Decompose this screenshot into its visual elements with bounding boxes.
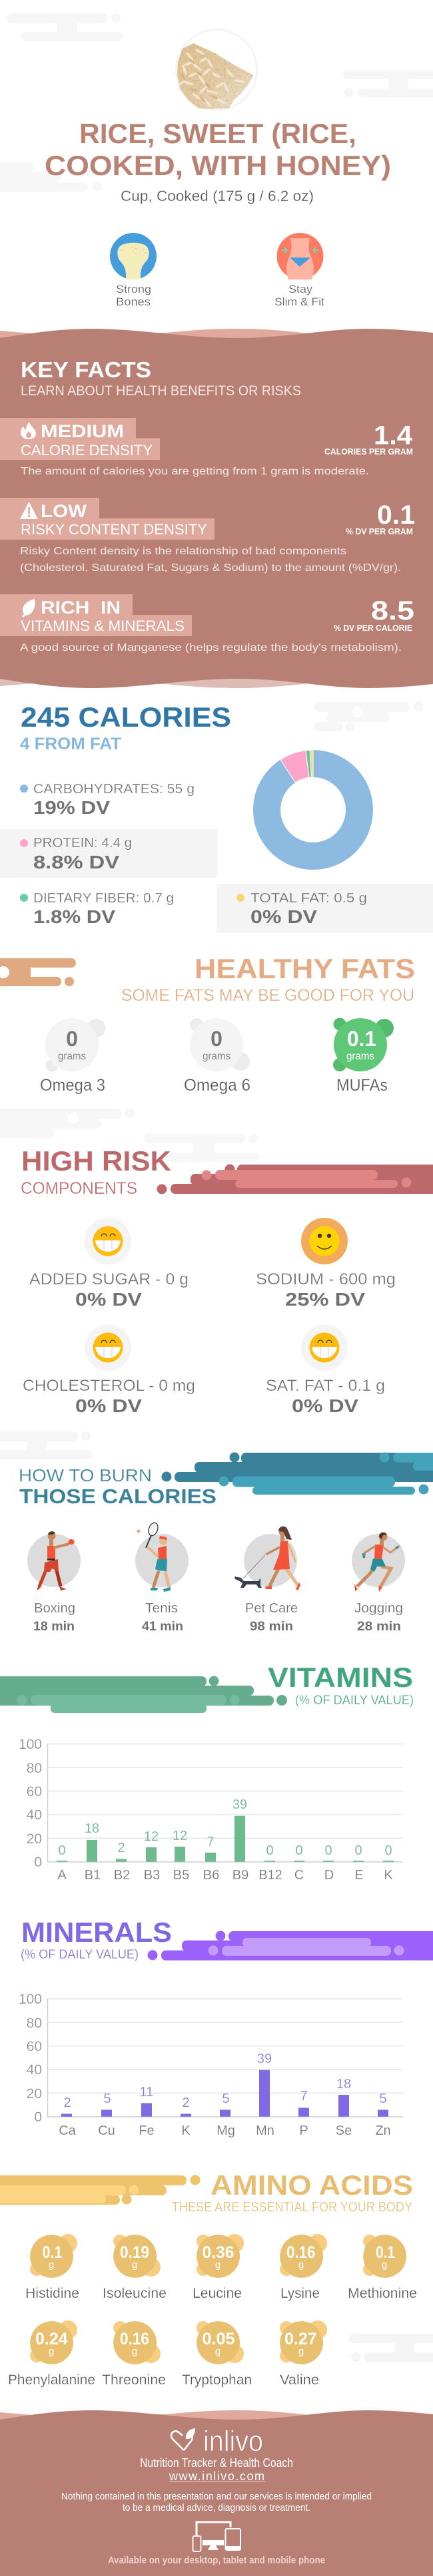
panel: minerals — [19, 1917, 433, 2138]
decoration: teal bars — [161, 1452, 433, 1495]
amino: tryptophan: g — [215, 2346, 220, 2357]
fact: calorie density: CALORIES PER GRAM — [324, 447, 413, 457]
tagline: Nutrition Tracker & Health Coach — [140, 2456, 293, 2470]
stat: omega 6: Omega 6 — [184, 1076, 250, 1095]
background cloud: amino right — [349, 2334, 433, 2362]
activity: jogging: Jogging — [354, 1601, 403, 1616]
fact: calorie density: CALORIE DENSITY — [21, 442, 153, 459]
bar chart: vitamins: E — [354, 1868, 364, 1883]
bar chart: minerals: 5 — [103, 2092, 111, 2106]
risk item: sodium: 25% DV — [285, 1289, 365, 1310]
background cloud: high risk center — [144, 1134, 260, 1162]
background cloud: burn — [0, 1431, 93, 1459]
icon: tennis player — [135, 1521, 189, 1592]
benefit: slim and fit: Slim & Fit — [274, 295, 324, 308]
image ring — [176, 29, 257, 110]
heading: MINERALS — [21, 1917, 172, 1948]
fact: risky content density: % DV PER GRAM — [346, 527, 413, 536]
amino: valine: Valine — [280, 2372, 319, 2388]
legend: dietary fiber: 1.8% DV — [33, 906, 115, 927]
stat: mufas: MUFAs — [336, 1076, 388, 1095]
amino: isoleucine: 0.19 — [120, 2243, 149, 2262]
subheading: COMPONENTS — [21, 1179, 137, 1198]
fact: rich in vitamins and minerals: 8.5 — [371, 596, 414, 626]
panel: key facts — [0, 329, 433, 688]
subheading: (% OF DAILY VALUE) — [21, 1948, 139, 1962]
bar chart: minerals: 2 — [63, 2096, 71, 2110]
risk item: added sugar: ADDED SUGAR - 0 g — [29, 1270, 189, 1288]
heading: KEY FACTS — [21, 357, 151, 382]
benefit: strong bones: Bones — [116, 295, 151, 308]
heading: 245 CALORIES — [21, 701, 231, 733]
fact: risky content density: Risky Content density is the relationship of bad components — [20, 546, 346, 557]
bar chart: vitamins: B6 — [203, 1868, 219, 1883]
amino: leucine: 0.36 — [203, 2243, 234, 2262]
stat: omega 3: 0 — [66, 1027, 78, 1051]
amino: methionine: 0.1 — [376, 2243, 395, 2262]
heading: AMINO ACIDS — [211, 2169, 413, 2201]
bar chart: minerals — [19, 1992, 403, 2138]
amino: tryptophan — [182, 2321, 252, 2388]
bar chart: vitamins — [19, 1737, 403, 1883]
amino: lysine: Lysine — [280, 2286, 320, 2301]
heading: HEALTHY FATS — [195, 953, 415, 984]
benefit: slim and fit: Stay — [288, 283, 313, 295]
stat: omega 3: grams — [58, 1051, 86, 1062]
icon: leaf — [22, 599, 35, 618]
decoration: yellow bars — [0, 2175, 200, 2205]
bar chart: minerals: Cu — [98, 2123, 115, 2138]
amino: tryptophan: Tryptophan — [182, 2372, 252, 2388]
risk item: added sugar: 0% DV — [75, 1289, 142, 1310]
fact: rich in vitamins and minerals — [0, 594, 414, 653]
risk item: cholesterol: 0% DV — [75, 1395, 142, 1416]
decoration: purple bars — [148, 1931, 433, 1960]
amino: leucine: Leucine — [193, 2286, 242, 2301]
amino: lysine: g — [298, 2259, 304, 2271]
panel: vitamins — [0, 1662, 414, 1883]
panel: how to burn — [19, 1452, 433, 1634]
bar chart: vitamins: B3 — [144, 1868, 160, 1883]
bar chart: vitamins: 20 — [27, 1831, 42, 1847]
disclaimer — [61, 2491, 372, 2513]
activity: pet care: 98 min — [250, 1620, 293, 1634]
stat: mufas: grams — [346, 1051, 374, 1062]
bar chart: vitamins: 80 — [27, 1761, 42, 1776]
icon: bone — [110, 233, 157, 279]
fact: rich in vitamins and minerals: A good source of Manganese (helps regulate the body's metabolism). — [20, 642, 402, 653]
stat: omega 3 — [40, 1018, 105, 1095]
decoration: red bars — [157, 1165, 433, 1194]
amino: valine: g — [298, 2346, 304, 2357]
title — [45, 118, 391, 181]
subheading: 4 FROM FAT — [20, 735, 121, 753]
donut chart — [266, 750, 360, 856]
amino: phenylalanine: g — [49, 2346, 54, 2357]
bar chart: minerals: K — [181, 2123, 191, 2138]
website link: www.inlivo.com — [169, 2470, 264, 2483]
food image: rice — [173, 29, 257, 112]
icon: woman walking dog — [234, 1527, 300, 1590]
risk item: sodium — [256, 1218, 396, 1310]
fact: calorie density: The amount of calories you are getting from 1 gram is moderate. — [21, 466, 369, 477]
amino: valine — [280, 2320, 327, 2388]
activity: jogging: 28 min — [357, 1620, 401, 1634]
decoration: green bars — [0, 1676, 287, 1713]
activity: pet care — [234, 1527, 300, 1634]
icon: smile face — [301, 1218, 348, 1264]
serving size: Cup, Cooked (175 g / 6.2 oz) — [121, 188, 314, 204]
activity: boxing: Boxing — [34, 1601, 75, 1616]
subheading: LEARN ABOUT HEALTH BENEFITS OR RISKS — [21, 383, 301, 399]
fact: risky content density — [0, 498, 415, 574]
activity: tennis — [135, 1521, 189, 1634]
subheading: SOME FATS MAY BE GOOD FOR YOU — [121, 986, 414, 1005]
bar chart: minerals: Zn — [375, 2123, 391, 2138]
bar chart: minerals: 5 — [379, 2092, 387, 2106]
bar chart: vitamins: 0 — [295, 1843, 303, 1858]
bar chart: vitamins: 12 — [144, 1829, 159, 1844]
heading line 1: HOW TO BURN — [19, 1465, 152, 1485]
fact: calorie density — [0, 418, 413, 477]
title: COOKED, WITH HONEY) — [45, 150, 391, 181]
bar chart: vitamins: 0 — [324, 1843, 332, 1858]
bar chart: vitamins: 60 — [27, 1784, 42, 1799]
amino: isoleucine: Isoleucine — [103, 2286, 167, 2301]
bar chart: vitamins: A — [57, 1868, 67, 1883]
legend: dietary fiber: DIETARY FIBER: 0.7 g — [33, 891, 174, 906]
fact: rich in vitamins and minerals: % DV PER CALORIE — [334, 624, 412, 633]
background cloud: calories — [314, 701, 424, 731]
bar chart: vitamins: 39 — [232, 1797, 247, 1812]
bar chart: minerals: Mn — [256, 2123, 274, 2138]
bar chart: vitamins: 40 — [27, 1807, 42, 1823]
disclaimer: to be a medical advice, diagnosis or treatment. — [123, 2503, 310, 2513]
heading line 2: THOSE CALORIES — [19, 1485, 217, 1508]
subheading: THESE ARE ESSENTIAL FOR YOUR BODY — [172, 2200, 412, 2215]
legend: total fat — [236, 891, 367, 927]
fact: risky content density: RISKY CONTENT DENSITY — [21, 521, 207, 538]
bar chart: vitamins: D — [324, 1868, 334, 1883]
icon: boxer — [27, 1531, 81, 1590]
bar chart: vitamins: 100 — [19, 1737, 42, 1752]
fact: calorie density: MEDIUM — [41, 421, 124, 441]
bar chart: minerals: Fe — [139, 2123, 155, 2138]
risk item: saturated fat: SAT. FAT - 0.1 g — [266, 1377, 385, 1395]
amino: isoleucine — [103, 2235, 167, 2301]
panel: calories — [0, 701, 433, 933]
fact: risky content density: (Cholesterol, Saturated Fat, Sugars & Sodium) to the amount (%DV/gr). — [20, 562, 401, 574]
amino: histidine — [25, 2234, 79, 2301]
bar chart: vitamins: 0 — [384, 1843, 392, 1858]
risk item: cholesterol: CHOLESTEROL - 0 mg — [23, 1377, 195, 1395]
amino: methionine: Methionine — [348, 2286, 417, 2301]
icon: waist — [277, 233, 324, 279]
activity: tennis: Tenis — [145, 1601, 178, 1616]
icon: grin face — [85, 1324, 131, 1371]
disclaimer: Nothing contained in this presentation and our services is intended or implied — [61, 2491, 372, 2502]
amino: methionine: g — [382, 2259, 387, 2271]
stat: omega 6: grams — [203, 1051, 230, 1062]
bar chart: minerals: 40 — [27, 2062, 42, 2078]
bar chart: minerals: Ca — [59, 2123, 77, 2138]
amino: valine: 0.27 — [284, 2330, 317, 2348]
bar chart: minerals: 20 — [27, 2086, 42, 2102]
bar chart: vitamins: B2 — [114, 1868, 130, 1883]
icon: warning triangle — [20, 502, 38, 519]
amino: phenylalanine: Phenylalanine — [8, 2372, 95, 2388]
background cloud: top left — [7, 13, 123, 41]
amino: threonine: g — [132, 2346, 137, 2357]
legend: dietary fiber — [20, 891, 174, 927]
stat: omega 3: Omega 3 — [40, 1076, 105, 1095]
heading: HIGH RISK — [21, 1145, 171, 1177]
bar chart: minerals: 11 — [140, 2085, 153, 2100]
bar chart: minerals: 18 — [336, 2077, 351, 2092]
bar chart: vitamins: 7 — [207, 1835, 215, 1849]
bar chart: minerals: Mg — [217, 2123, 235, 2138]
panel: footer — [0, 2410, 433, 2576]
bar chart: minerals: P — [299, 2123, 308, 2138]
availability note: Available on your desktop, tablet and mobile phone — [108, 2555, 325, 2566]
fact: risky content density: 0.1 — [377, 500, 415, 530]
background cloud: top right — [343, 70, 433, 97]
panel: high risk components — [21, 1145, 433, 1416]
risk item: added sugar — [29, 1218, 189, 1310]
bar chart: vitamins: B12 — [258, 1868, 282, 1883]
legend: carbohydrates: 19% DV — [33, 797, 110, 818]
bar chart: minerals: 100 — [19, 1992, 42, 2007]
bar chart: vitamins: 0 — [354, 1843, 362, 1858]
activity: jogging — [352, 1532, 405, 1634]
wave background — [0, 329, 433, 688]
activity: boxing — [27, 1531, 81, 1634]
amino: threonine: 0.16 — [120, 2330, 149, 2348]
stat: mufas — [333, 1018, 394, 1095]
title: RICE, SWEET (RICE, — [79, 118, 356, 149]
bar chart: vitamins: 0 — [34, 1855, 42, 1870]
amino: methionine — [348, 2235, 417, 2301]
stat: omega 6 — [184, 1018, 250, 1095]
bar chart: minerals: 80 — [27, 2016, 42, 2031]
legend highlight: total fat — [217, 884, 433, 933]
bar chart: minerals: 0 — [34, 2110, 42, 2125]
amino: histidine: 0.1 — [43, 2243, 63, 2262]
bar chart: minerals: 5 — [222, 2092, 230, 2106]
amino: leucine: g — [215, 2259, 220, 2271]
bar chart: vitamins: 12 — [173, 1829, 187, 1843]
legend: carbohydrates — [20, 782, 195, 818]
bar chart: vitamins: 0 — [266, 1843, 274, 1858]
benefit: strong bones — [110, 233, 157, 308]
bar chart: vitamins: B5 — [173, 1868, 189, 1883]
bar chart: minerals: 7 — [300, 2089, 308, 2104]
amino: phenylalanine — [8, 2320, 95, 2388]
amino: lysine: 0.16 — [286, 2243, 316, 2262]
amino: tryptophan: 0.05 — [203, 2330, 235, 2348]
amino: leucine — [193, 2234, 244, 2301]
legend: total fat: TOTAL FAT: 0.5 g — [250, 891, 367, 906]
bar chart: vitamins: K — [384, 1868, 393, 1883]
logo — [171, 2425, 263, 2458]
fact: rich in vitamins and minerals: RICH IN — [41, 598, 121, 618]
risk item: saturated fat: 0% DV — [292, 1395, 358, 1416]
heading: VITAMINS — [268, 1662, 413, 1693]
icon: flame — [21, 422, 36, 439]
amino: histidine: g — [49, 2259, 54, 2271]
risk item: cholesterol — [23, 1324, 195, 1416]
legend: protein: 8.8% DV — [33, 852, 119, 872]
benefit: strong bones: Strong — [116, 283, 151, 295]
amino: threonine: Threonine — [102, 2372, 166, 2388]
fact: risky content density: LOW — [41, 501, 87, 521]
background cloud: left of title — [0, 162, 102, 192]
bar chart: minerals: 60 — [27, 2039, 42, 2054]
bar chart: minerals: Se — [336, 2123, 352, 2138]
stat: omega 6: 0 — [211, 1027, 222, 1051]
decoration: brown bars — [0, 958, 76, 986]
risk item: saturated fat — [266, 1324, 385, 1416]
amino: histidine: Histidine — [25, 2286, 79, 2301]
fact: rich in vitamins and minerals: VITAMINS & MINERALS — [21, 618, 185, 634]
subheading: (% OF DAILY VALUE) — [295, 1694, 414, 1708]
activity: pet care: Pet Care — [245, 1601, 298, 1616]
background cloud: high risk left — [0, 1109, 135, 1138]
icon: grin face — [85, 1218, 131, 1264]
icon: jogger — [352, 1532, 405, 1592]
legend: carbohydrates: CARBOHYDRATES: 55 g — [33, 782, 195, 797]
logo: inlivo — [203, 2425, 263, 2458]
bar chart: vitamins: B9 — [232, 1868, 248, 1883]
legend highlight: protein — [0, 829, 217, 878]
panel: amino acids — [0, 2169, 417, 2388]
icon: grin face — [301, 1324, 348, 1371]
fact: calorie density: 1.4 — [374, 421, 413, 450]
activity: tennis: 41 min — [142, 1620, 183, 1634]
amino: threonine — [102, 2321, 166, 2388]
bar chart: vitamins: 0 — [58, 1843, 66, 1858]
legend: protein: PROTEIN: 4.4 g — [33, 836, 132, 850]
bar chart: vitamins: 2 — [117, 1841, 125, 1855]
icon: devices — [193, 2522, 240, 2551]
panel: healthy fats — [0, 953, 415, 1095]
benefit: slim and fit — [274, 233, 324, 308]
wave background — [0, 2410, 433, 2576]
bar chart: vitamins: C — [294, 1868, 304, 1883]
risk item: sodium: SODIUM - 600 mg — [256, 1270, 396, 1288]
activity: boxing: 18 min — [33, 1620, 75, 1634]
bar chart: minerals: 2 — [182, 2096, 190, 2110]
bar chart: vitamins: 18 — [85, 1821, 99, 1836]
bar chart: minerals: 39 — [257, 2052, 272, 2066]
amino: phenylalanine: 0.24 — [35, 2330, 68, 2348]
icon: heart with leaf — [171, 2428, 195, 2450]
bar chart: vitamins: B1 — [85, 1868, 101, 1883]
amino: lysine — [280, 2234, 327, 2301]
amino: isoleucine: g — [132, 2259, 137, 2271]
stat: mufas: 0.1 — [347, 1027, 376, 1051]
legend: protein — [20, 836, 132, 872]
legend: total fat: 0% DV — [250, 906, 317, 927]
